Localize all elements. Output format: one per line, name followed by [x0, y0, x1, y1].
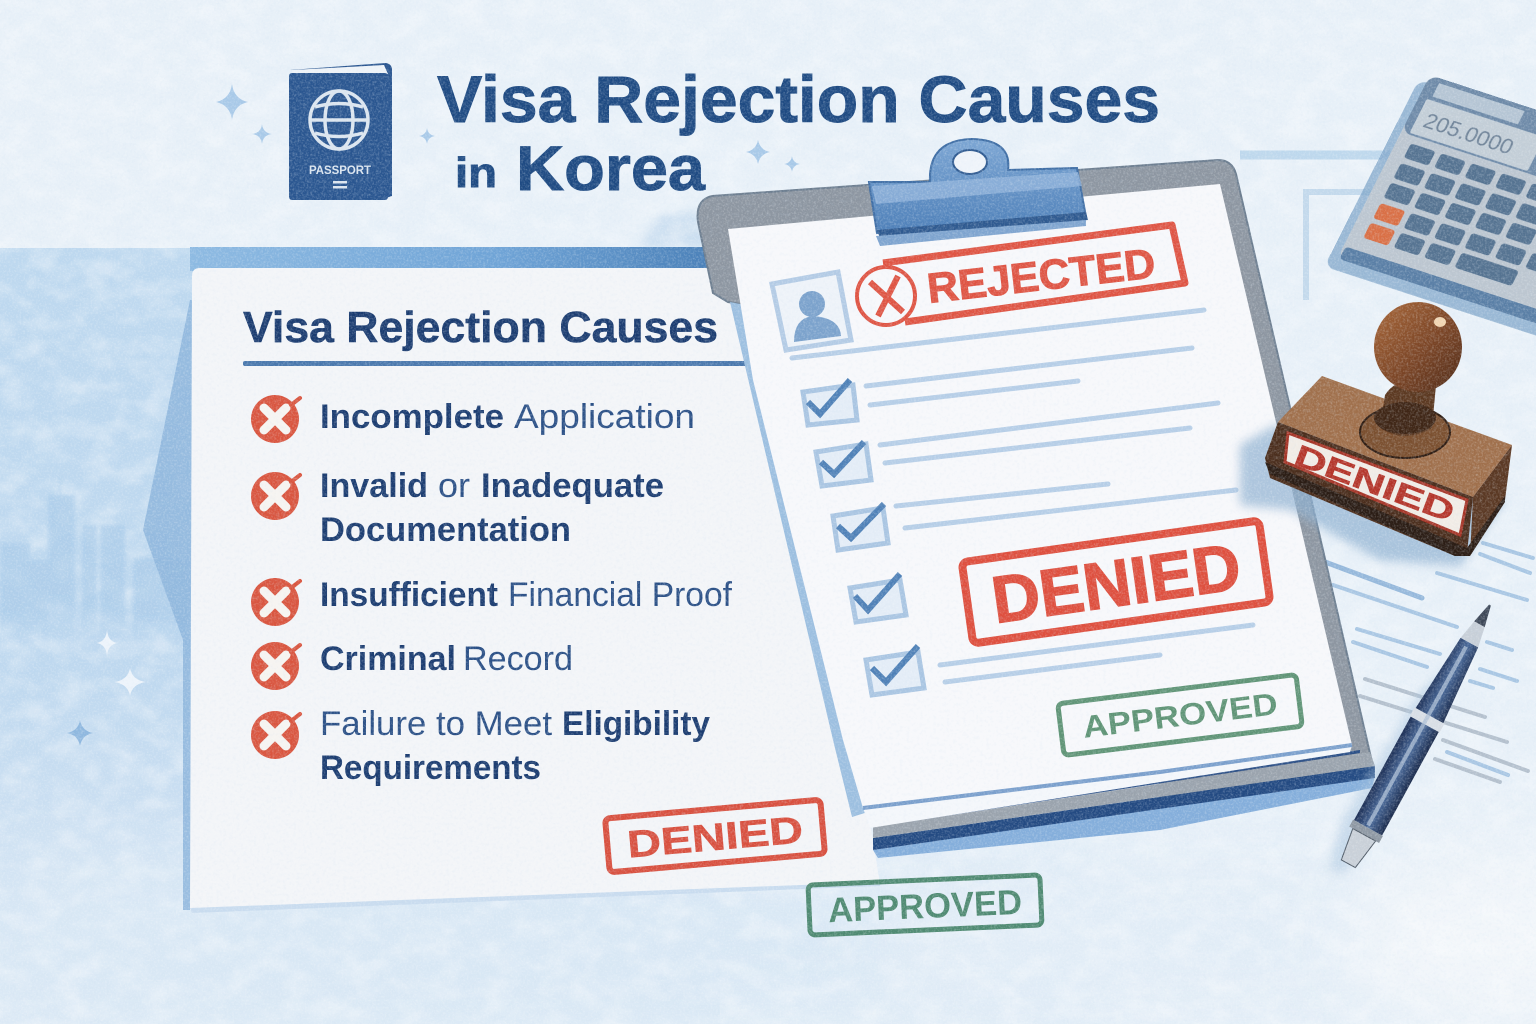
calculator [1324, 73, 1536, 368]
stamp: approved on clipboard: APPROVED [1081, 686, 1279, 745]
cause: insufficient financial proof [251, 576, 733, 626]
cause: criminal record [251, 640, 573, 690]
cause: invalid or inadequate documentation: Invalid [320, 467, 428, 505]
title: Visa Rejection Causes [437, 62, 1160, 136]
cause: failure to meet eligibility requirements: Eligibility [562, 705, 710, 743]
clipboard [698, 139, 1375, 858]
sparkles: lower left [67, 630, 146, 746]
board bottom rail [873, 750, 1375, 858]
icon: passport: PASSPORT [309, 163, 372, 177]
stamp: approved on clipboard [1058, 675, 1302, 755]
stamp label [1285, 433, 1467, 535]
cause: invalid or inadequate documentation: Inadequate [481, 467, 664, 505]
stamp: denied on panel: DENIED [626, 809, 805, 867]
cause: invalid or inadequate documentation: Documentation [320, 511, 571, 549]
cause: criminal record: Record [463, 640, 573, 678]
stamp: denied on clipboard: DENIED [987, 529, 1245, 637]
city skyline [0, 477, 190, 643]
cause: failure to meet eligibility requirements: Requirements [320, 749, 541, 787]
icon: passport [289, 63, 392, 200]
title [437, 62, 1160, 204]
cause: incomplete application: Application [514, 398, 695, 436]
paper [728, 184, 1352, 808]
stamp block [1265, 422, 1473, 556]
panel heading: Visa Rejection Causes [243, 303, 718, 352]
stamp: denied on panel [605, 800, 825, 872]
cause: invalid or inadequate documentation [251, 467, 664, 549]
stamp shadow [1240, 425, 1505, 566]
binder clip [869, 139, 1088, 246]
cause: insufficient financial proof: Financial Proof [508, 576, 733, 614]
cause: incomplete application [251, 395, 695, 443]
pen [1328, 597, 1505, 875]
cause: insufficient financial proof: Insufficient [320, 576, 498, 614]
cause: failure to meet eligibility requirements [251, 705, 710, 787]
stamp: approved below panel [808, 875, 1042, 935]
board edge strip [730, 302, 868, 817]
desk documents behind clipboard [1240, 155, 1533, 782]
sparkles: title [216, 84, 800, 172]
board: top and right rails [698, 160, 1372, 812]
calculator keys [1363, 143, 1536, 295]
form lines and checkboxes [792, 310, 1253, 695]
applicant photo [772, 272, 851, 350]
cause: incomplete application: Incomplete [320, 398, 504, 436]
title: Korea [516, 134, 706, 204]
stamp: rejected: REJECTED [925, 239, 1158, 312]
panel shadow [143, 300, 192, 910]
stamp handle [1360, 302, 1462, 458]
stamp: rejected [857, 225, 1185, 325]
panel top band [190, 247, 710, 271]
cause: failure to meet eligibility requirements: Failure to Meet [320, 705, 553, 743]
stamp: approved below panel: APPROVED [827, 883, 1023, 930]
cause: criminal record: Criminal [320, 640, 456, 678]
title: in [455, 149, 497, 196]
under sheet [863, 745, 1352, 828]
stamp label: DENIED [1290, 439, 1459, 529]
panel: causes [143, 247, 880, 913]
rubber stamp [1240, 302, 1512, 566]
calculator: 205.0000 [1420, 108, 1518, 159]
cause: invalid or inadequate documentation: or [438, 467, 470, 505]
